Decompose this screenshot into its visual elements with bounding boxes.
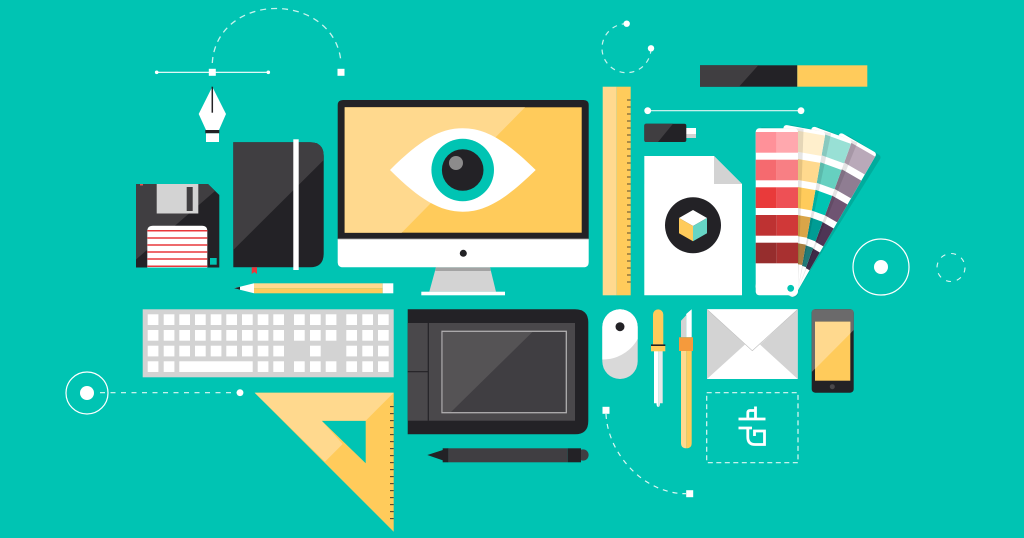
- icon: floppy disk: [136, 184, 219, 268]
- icon: graphics tablet: [408, 309, 588, 434]
- icon: pen nib: [199, 87, 226, 142]
- icon: keyboard: [143, 309, 394, 377]
- pantone color fan: [755, 125, 882, 298]
- monitor with eye: [338, 100, 589, 295]
- guide line with dots: [644, 107, 804, 114]
- icon: logo mark: [738, 406, 766, 444]
- icon: USB stick: [644, 124, 696, 142]
- bezier arc lower: [602, 407, 693, 497]
- monitor screen: [345, 107, 582, 233]
- fan shadow: [757, 134, 882, 298]
- icon: envelope: [707, 309, 798, 379]
- icon: document with cube: [644, 156, 742, 295]
- dashed logo box: [707, 393, 798, 463]
- icon: pencil: [234, 283, 393, 293]
- swatch card yellow: [755, 125, 826, 296]
- tablet active area: [442, 331, 566, 413]
- icon: mouse: [602, 309, 638, 379]
- swatch card red: [756, 128, 798, 295]
- eye: [390, 128, 536, 212]
- icon: smartphone: [812, 309, 854, 393]
- icon: notebook: [233, 139, 324, 274]
- monitor stand: [421, 267, 505, 295]
- icon: set square triangle: [255, 393, 394, 532]
- monitor body: [338, 100, 589, 239]
- target with dashed line left: [66, 372, 243, 414]
- swatch card teal: [755, 126, 852, 297]
- dashed circle right: [937, 254, 965, 282]
- color bar: [700, 65, 867, 87]
- icon: marker pen: [651, 309, 665, 407]
- dashed circle with handles: [602, 20, 654, 73]
- swatch card purple: [757, 132, 877, 298]
- icon: ruler: [603, 87, 631, 295]
- icon: craft knife: [679, 309, 693, 448]
- target circle right: [853, 239, 909, 295]
- bezier arc with handles: [155, 8, 344, 76]
- icon: stylus pen: [427, 448, 589, 462]
